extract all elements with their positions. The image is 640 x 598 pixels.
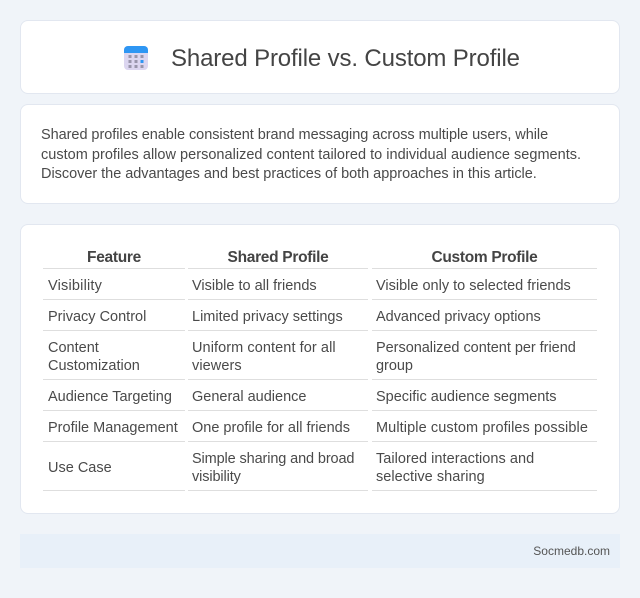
row: audience targeting: General audience xyxy=(192,389,306,405)
intro text: Shared profiles enable consistent brand messaging across multiple users, while xyxy=(41,127,548,143)
row: content customization: Customization xyxy=(48,358,140,374)
row: profile management: Profile Management xyxy=(48,420,178,436)
row: content customization: group xyxy=(376,358,413,374)
intro text: custom profiles allow personalized content tailored to individual audience segments. xyxy=(41,146,581,162)
intro text: Discover the advantages and best practices of both approaches in this article. xyxy=(41,166,537,182)
row: profile management: One profile for all friends xyxy=(192,420,350,436)
footer credit: Socmedb.com xyxy=(533,544,610,558)
panel: comparison table xyxy=(20,224,620,514)
row: use case: selective sharing xyxy=(376,469,485,485)
title: Shared Profile vs. Custom Profile xyxy=(171,45,520,72)
row: audience targeting: Audience Targeting xyxy=(48,389,172,405)
row: content customization: Uniform content for all xyxy=(192,340,336,356)
row: use case: Simple sharing and broad xyxy=(192,451,354,467)
row: content customization: Personalized content per friend xyxy=(376,340,576,356)
row: profile management xyxy=(48,420,588,436)
header row: Feature xyxy=(87,249,141,266)
panel: introduction xyxy=(20,104,620,204)
row: privacy control: Privacy Control xyxy=(48,309,146,325)
row: privacy control: Limited privacy settings xyxy=(192,309,343,325)
row: content customization xyxy=(48,340,576,374)
row: use case: Tailored interactions and xyxy=(376,451,534,467)
row: visibility: Visibility xyxy=(48,278,102,294)
intro text xyxy=(41,127,581,182)
row: use case: Use Case xyxy=(48,460,112,476)
row: visibility xyxy=(48,278,571,294)
row: use case xyxy=(48,451,534,485)
row: audience targeting xyxy=(48,389,557,405)
header row: Shared Profile xyxy=(228,249,328,266)
row: profile management: Multiple custom profiles possible xyxy=(376,420,588,436)
header row: Custom Profile xyxy=(431,249,538,266)
row: visibility: Visible to all friends xyxy=(192,278,317,294)
row: content customization: viewers xyxy=(192,358,242,374)
row: use case: visibility xyxy=(192,469,241,485)
row: privacy control xyxy=(48,309,541,325)
row: content customization: Content xyxy=(48,340,99,356)
row: visibility: Visible only to selected friends xyxy=(376,278,571,294)
comparison table xyxy=(43,249,597,491)
row: audience targeting: Specific audience segments xyxy=(376,389,557,405)
panel: title card xyxy=(20,20,620,94)
footer bar xyxy=(20,534,620,568)
row: privacy control: Advanced privacy options xyxy=(376,309,541,325)
icon: calendar xyxy=(124,46,148,70)
header row xyxy=(87,249,538,266)
